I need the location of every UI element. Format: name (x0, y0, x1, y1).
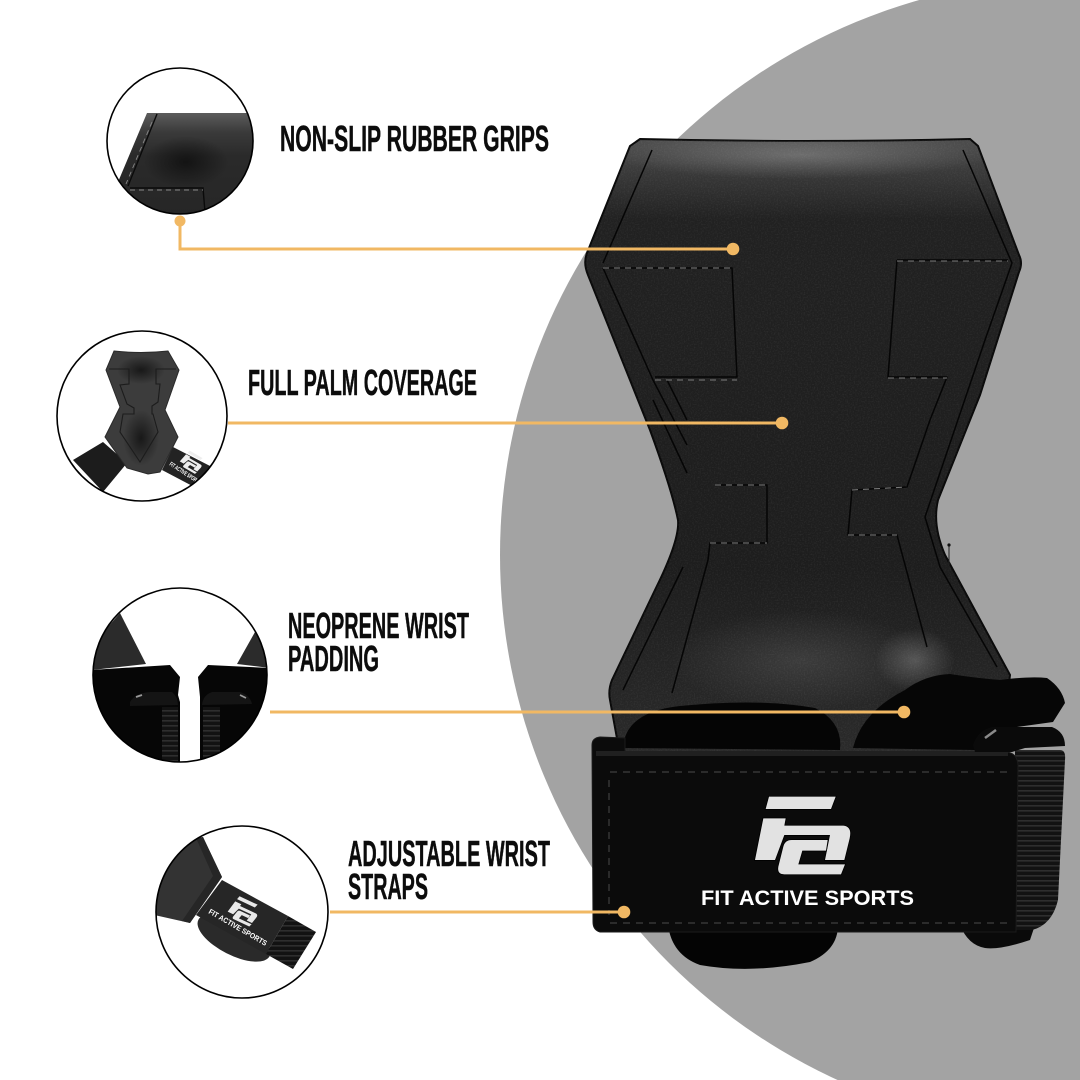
circle image: whole grip (73, 351, 212, 492)
connector dot on product (727, 243, 739, 255)
top buckle (973, 727, 1065, 752)
heading line 2: STRAPS (348, 866, 428, 907)
right neoprene pad (853, 674, 1065, 750)
circle image: strap close-up: FIT ACTIVE SPORTS (207, 907, 269, 948)
connector line (228, 422, 782, 424)
connector dot (898, 706, 910, 718)
stray pin mark (947, 543, 951, 565)
elastic strap (1015, 750, 1065, 930)
circle image: whole grip: FIT ACTIVE SPORTS (168, 462, 201, 486)
connector line (270, 710, 904, 714)
heading: NON-SLIP RUBBER GRIPS (280, 118, 549, 159)
connector line (330, 910, 624, 914)
heading: NEOPRENE WRIST (288, 605, 469, 646)
lower neoprene pad (668, 925, 838, 969)
brand logo: fa mark (755, 797, 850, 874)
left neoprene pad (623, 702, 840, 750)
callout 4: adjustable wrist straps (150, 826, 630, 998)
brand name text: FIT ACTIVE SPORTS (701, 886, 914, 910)
heading: ADJUSTABLE WRIST (348, 833, 550, 874)
circle outline (156, 826, 328, 998)
palm pad leather (580, 131, 1030, 760)
circle outline (93, 588, 267, 762)
callout 2: full palm coverage (57, 331, 788, 501)
connector dot (618, 906, 630, 918)
palm pad stitching (603, 150, 1012, 693)
strap top band (596, 751, 1008, 756)
connector line (180, 221, 733, 249)
lower buckle (960, 925, 1035, 948)
callout 3: neoprene wrist padding (90, 588, 910, 765)
circle outline (57, 331, 227, 501)
grey background circle (500, 0, 1080, 1080)
heading line 2: PADDING (288, 638, 379, 679)
circle image: strap close-up (150, 837, 316, 971)
wrist strap panel (592, 737, 1018, 932)
circle image: grip corner close-up (119, 113, 252, 214)
strap stitching (609, 772, 1010, 923)
connector dot at circle (174, 216, 186, 226)
heading: FULL PALM COVERAGE (248, 362, 477, 403)
connector dot (776, 417, 788, 429)
circle outline (107, 68, 253, 214)
circle image: pads and buckles (90, 613, 270, 765)
callout 1: non-slip rubber grips (100, 68, 739, 255)
product: palm pad lifting grip with wrist strap (580, 131, 1065, 969)
